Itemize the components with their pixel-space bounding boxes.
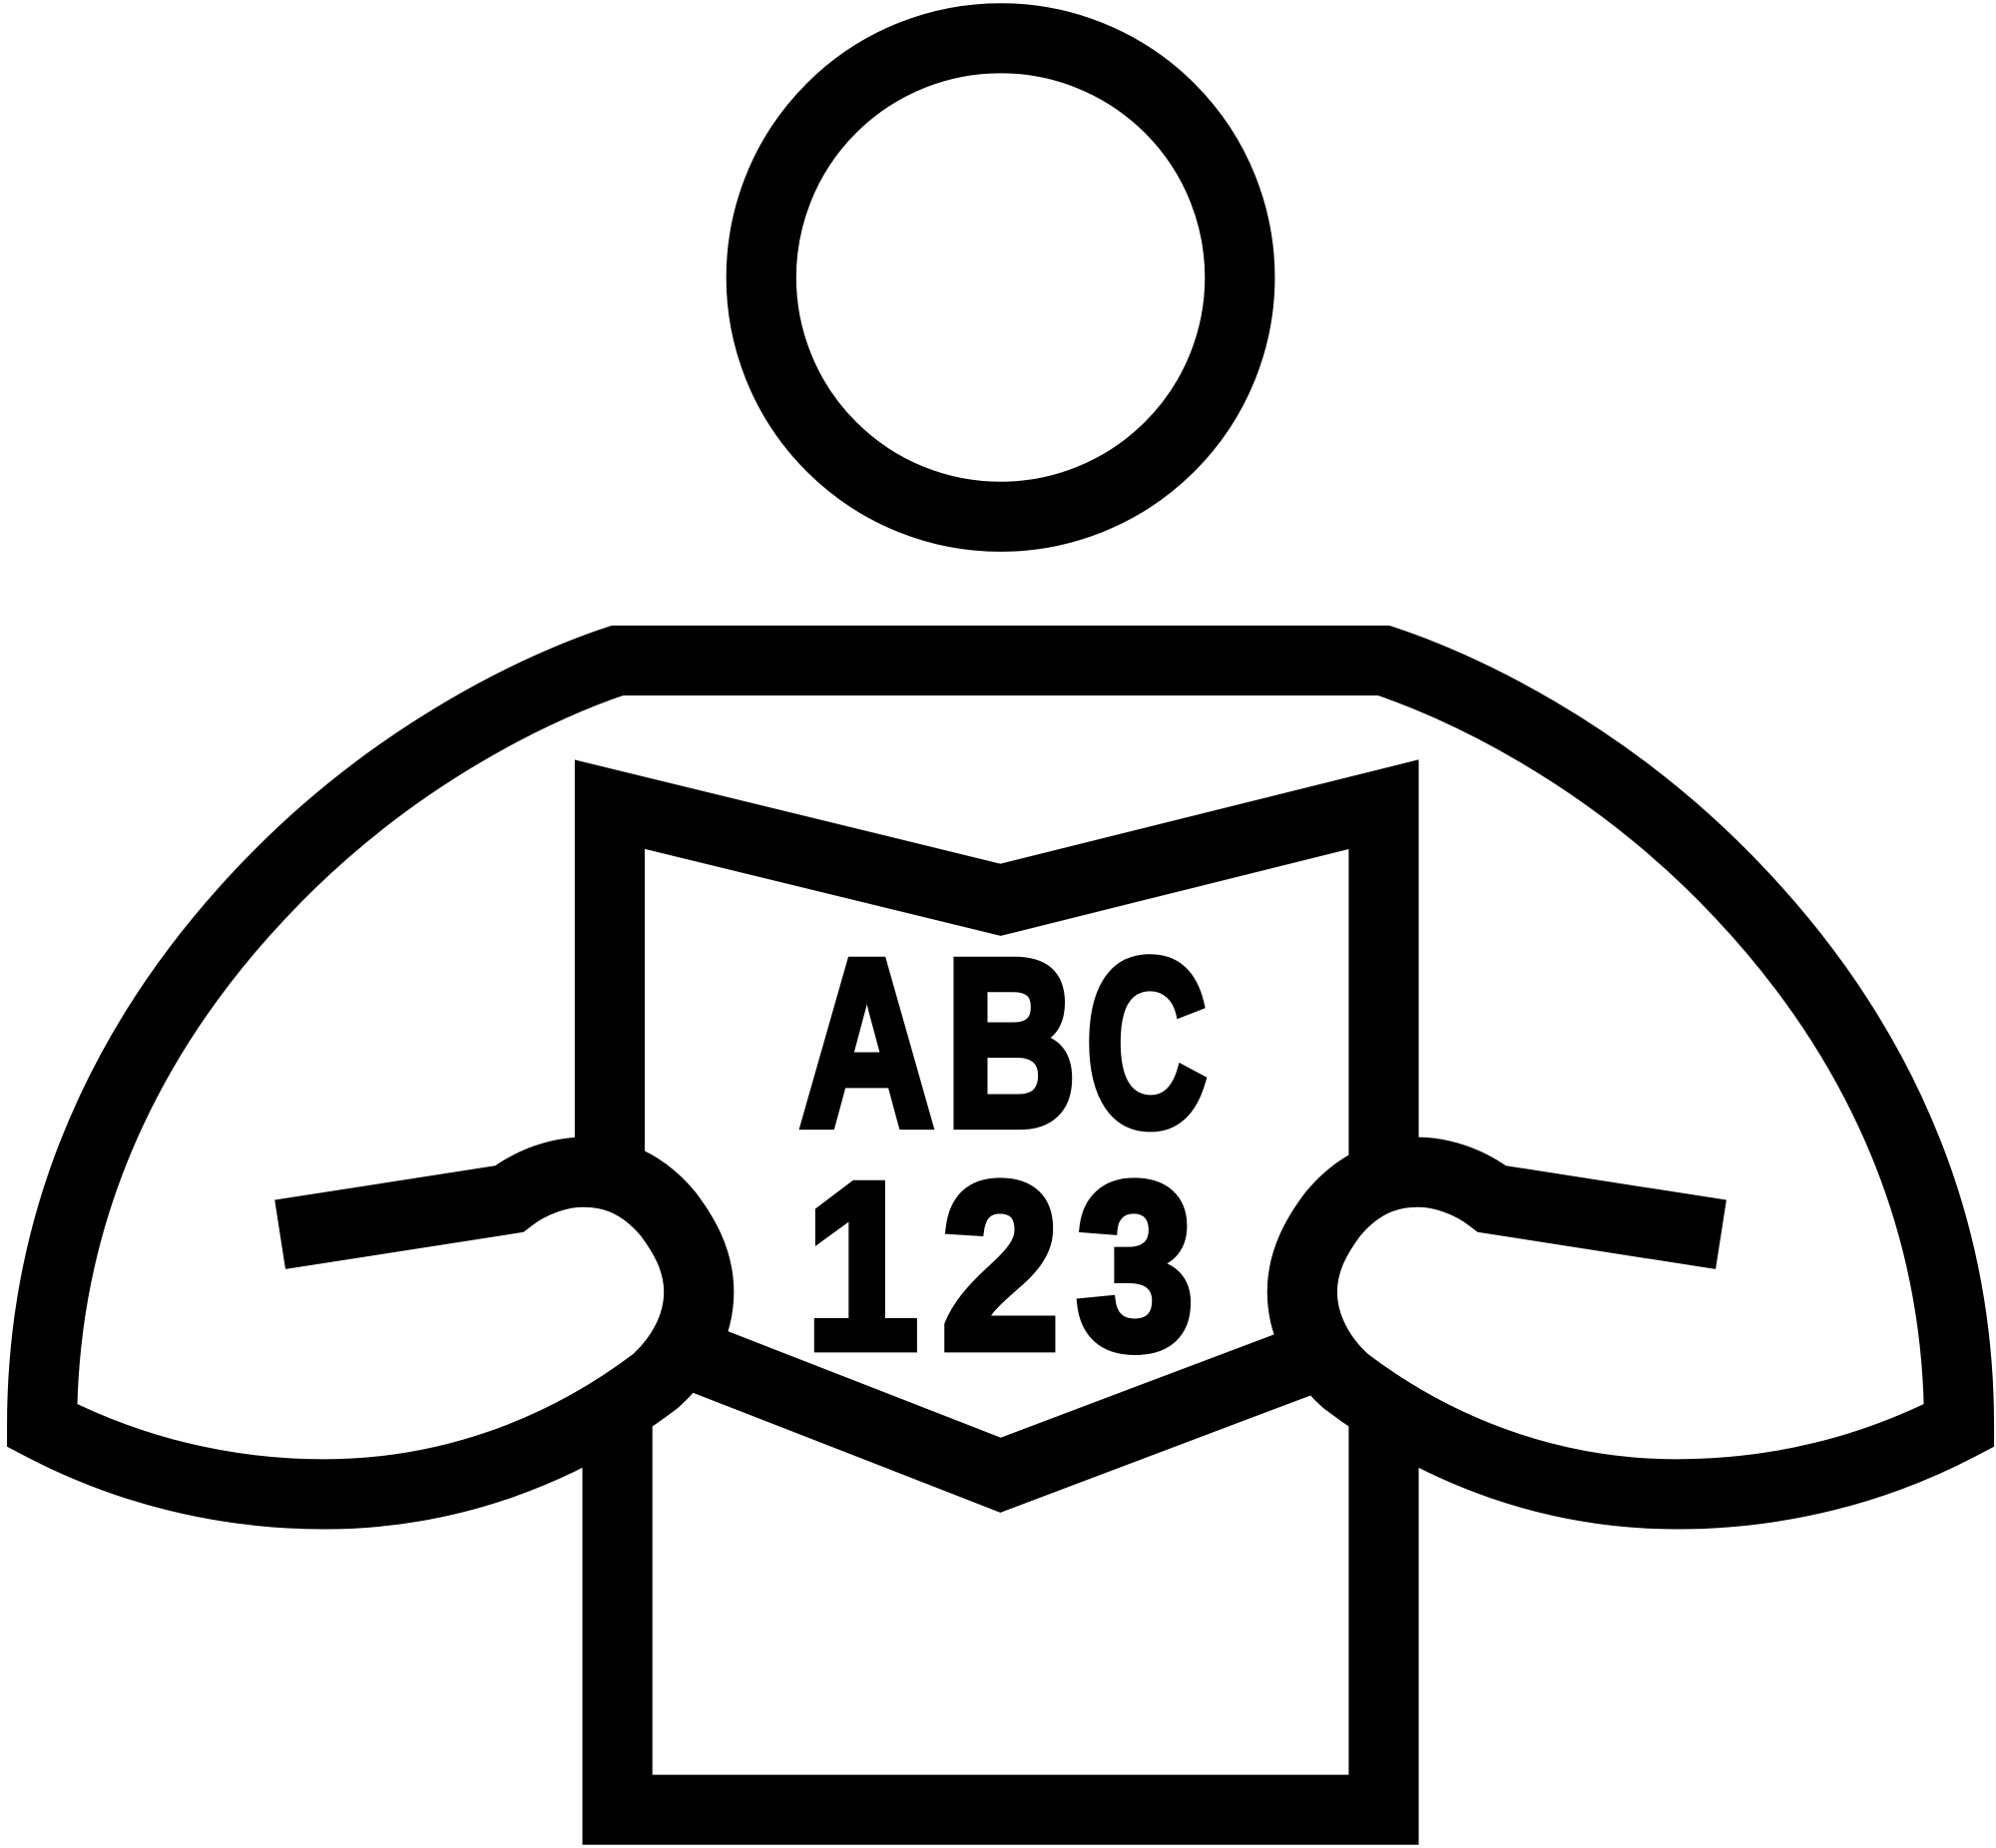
text: ABC: B: [945, 911, 1077, 1175]
text: 123: 1: [805, 1135, 918, 1398]
icon: head circle: [761, 38, 1240, 517]
text: ABC: A: [800, 911, 934, 1175]
text: ABC: C: [1086, 911, 1207, 1175]
text: ABC: [800, 911, 1207, 1175]
icon: open book covers: [610, 804, 1383, 1475]
icon: shoulders, arms and hands: [42, 661, 1959, 1494]
text: 123: 3: [1077, 1135, 1194, 1398]
text: 123: 2: [941, 1135, 1059, 1398]
icon: torso lower outline: [618, 1426, 1383, 1810]
text: 123: [805, 1135, 1194, 1398]
